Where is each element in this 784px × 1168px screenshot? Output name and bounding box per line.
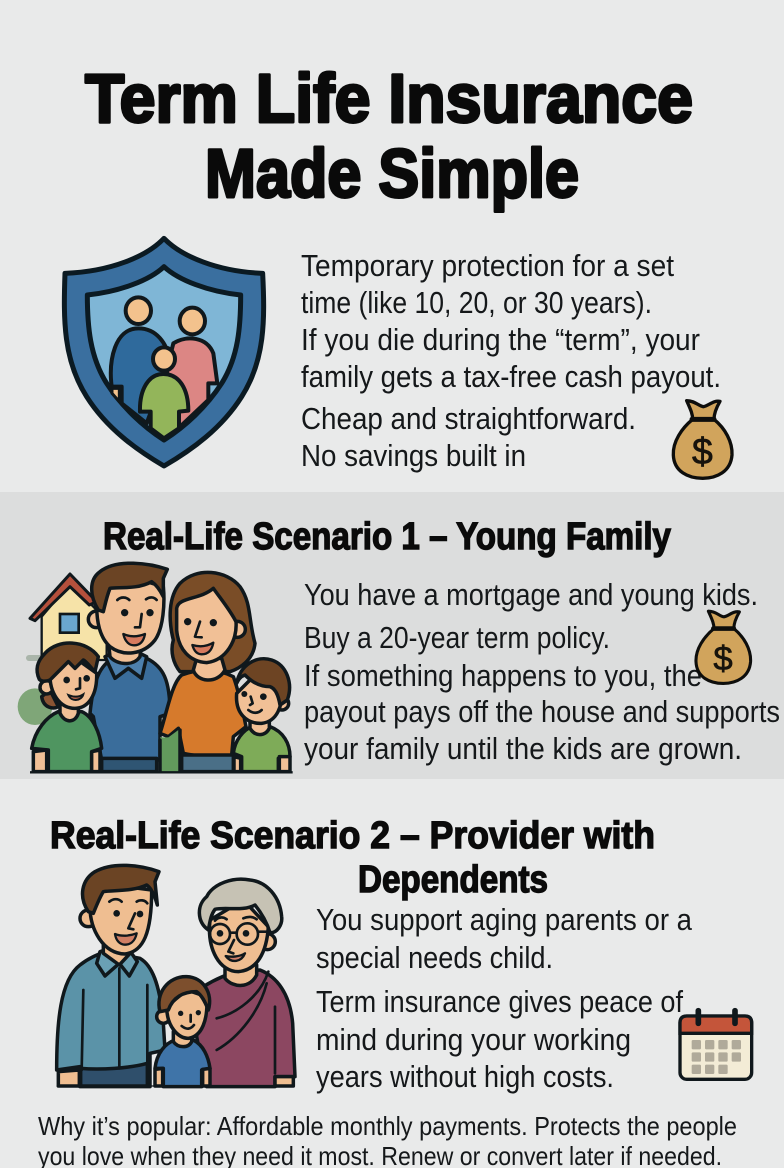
definition text: Cheap and straightforward. — [301, 401, 636, 436]
icon: money bag: $ — [713, 640, 733, 678]
scenario 1 text: If something happens to you, the — [304, 658, 702, 693]
scenario 2 text — [316, 902, 693, 1094]
scenario 2 text: Term insurance gives peace of — [316, 984, 683, 1019]
scenario 1 text — [304, 577, 780, 766]
scenario 2 text: You support aging parents or a — [316, 902, 693, 937]
scenario 2 text: years without high costs. — [316, 1059, 614, 1094]
scenario 2 text: special needs child. — [316, 940, 553, 975]
definition text — [301, 248, 721, 473]
icon: money bag — [673, 401, 732, 478]
icon: family inside shield — [64, 238, 264, 466]
icon: money bag: $ — [692, 430, 713, 472]
heading: scenario 2: Real-Life Scenario 2 – Provider with — [50, 815, 655, 857]
definition text: time (like 10, 20, or 30 years). — [301, 285, 652, 320]
panel: scenario 2 — [50, 815, 752, 1094]
illustration: young family and house — [18, 563, 293, 772]
definition text: family gets a tax-free cash payout. — [301, 359, 721, 394]
definition text: No savings built in — [301, 438, 526, 473]
heading: scenario 1: Real-Life Scenario 1 – Young Family — [103, 516, 671, 558]
scenario 1 text: Buy a 20-year term policy. — [304, 620, 610, 655]
scenario 1 text: your family until the kids are grown. — [304, 731, 742, 766]
title: Term Life Insurance — [85, 60, 693, 137]
title — [85, 60, 693, 212]
panel: definition — [64, 238, 732, 478]
panel: scenario 1 — [0, 492, 784, 779]
heading: scenario 2: Dependents — [358, 859, 548, 901]
definition text: Temporary protection for a set — [301, 248, 674, 283]
definition text: If you die during the “term”, your — [301, 322, 700, 357]
icon: calendar — [680, 1011, 752, 1079]
illustration: provider with parent and child — [57, 865, 295, 1087]
heading: scenario 2 — [50, 815, 655, 901]
footer text — [38, 1111, 737, 1168]
scenario 2 text: mind during your working — [316, 1022, 631, 1057]
title: Made Simple — [205, 135, 579, 212]
icon: money bag — [696, 611, 751, 683]
